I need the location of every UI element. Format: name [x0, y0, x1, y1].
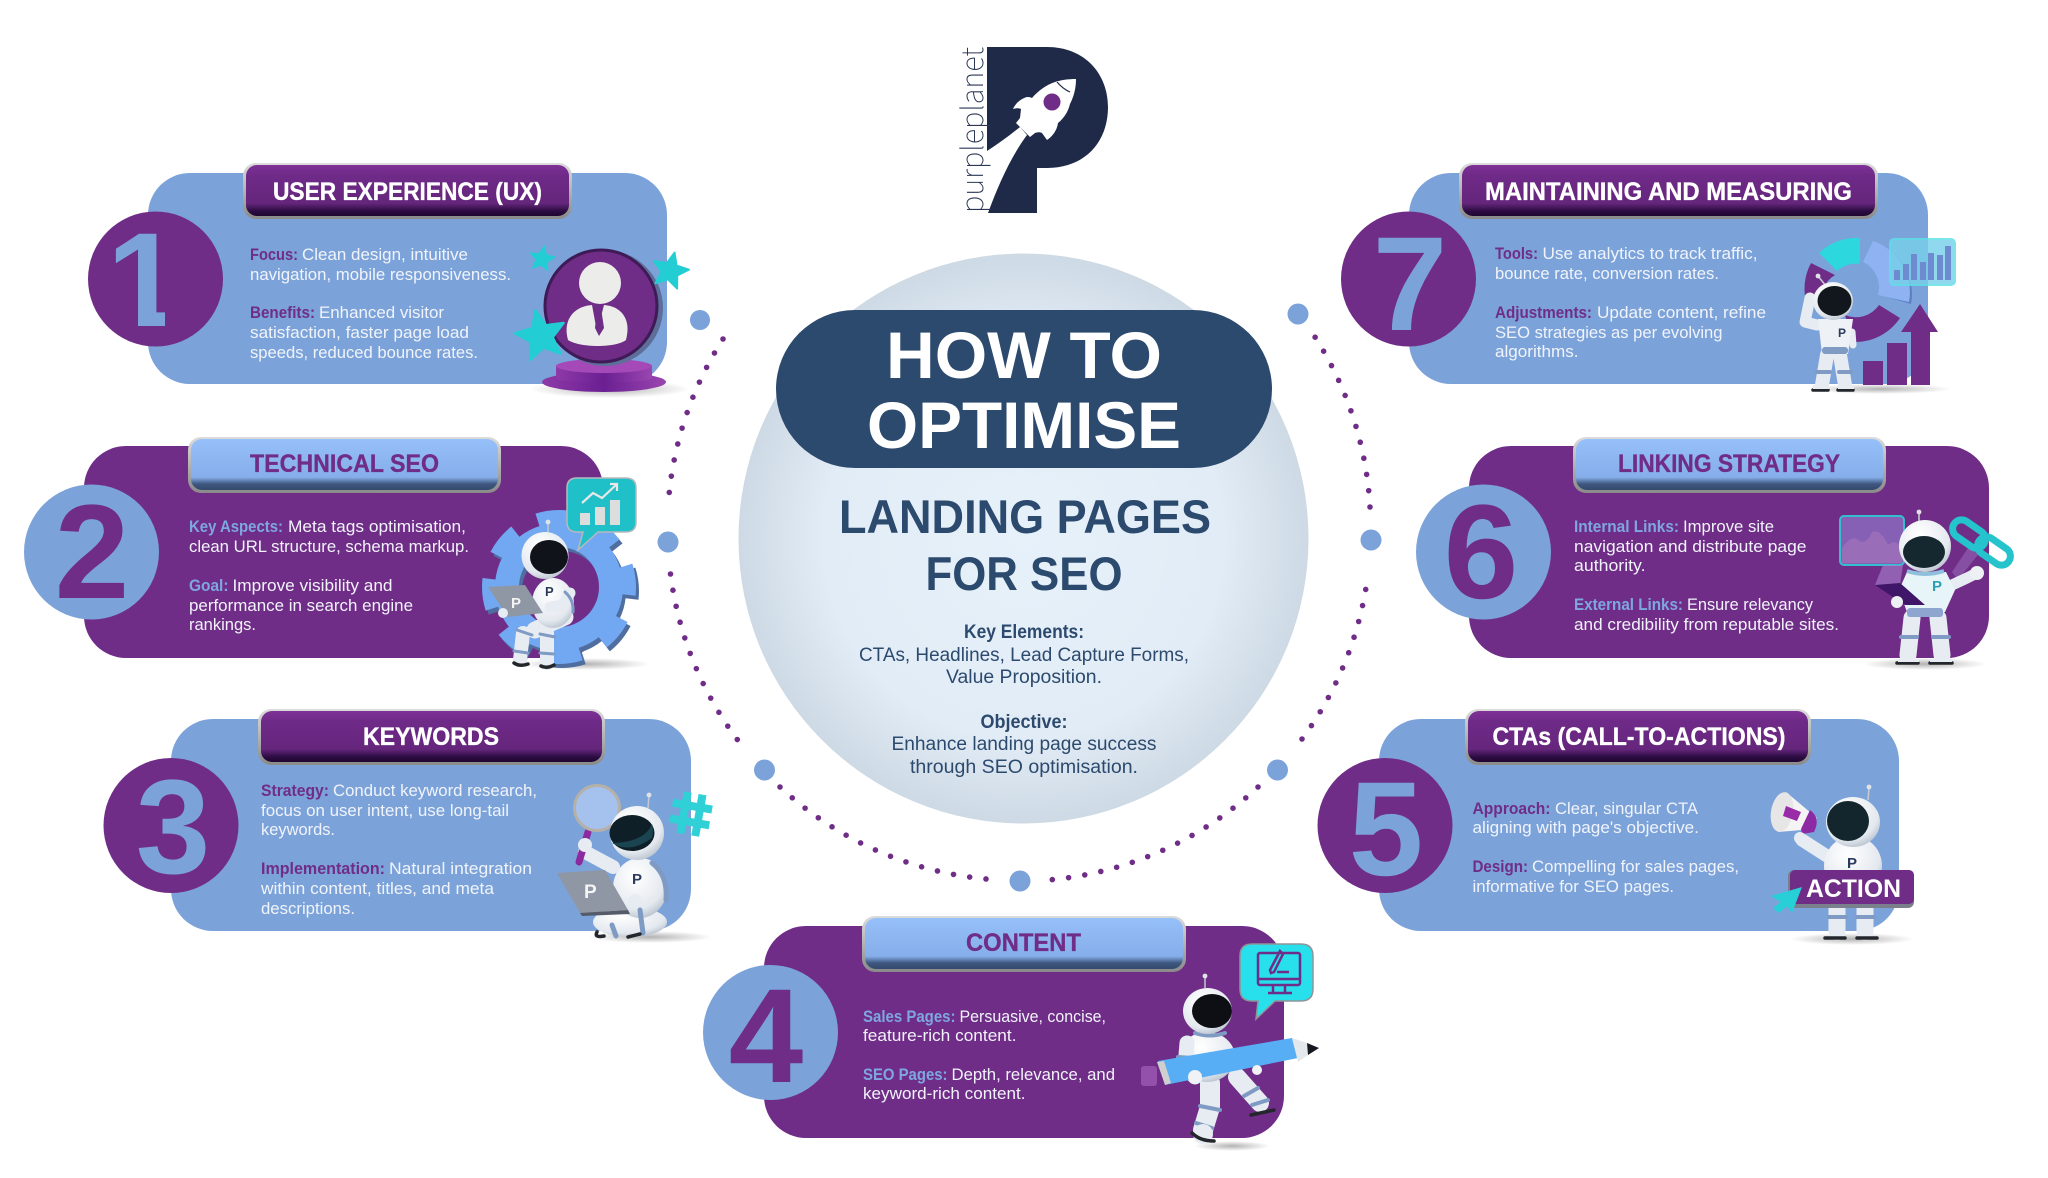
heading: [243, 163, 572, 219]
body text: Clear, singular CTA: [1555, 799, 1699, 818]
body text: feature-rich content.: [863, 1026, 1016, 1045]
heading: [1573, 437, 1886, 493]
heading: [258, 709, 605, 765]
body text: Approach:: [1472, 799, 1550, 818]
heading: [188, 437, 501, 493]
body text: Benefits:: [250, 303, 315, 322]
body text: Tools:: [1495, 244, 1538, 263]
body text: Ensure relevancy: [1687, 595, 1813, 614]
body text: algorithms.: [1495, 342, 1578, 361]
icon: astronaut with gear and laptop: P: [511, 595, 521, 612]
body text: Improve visibility and: [232, 576, 392, 595]
body text: Use analytics to track traffic,: [1542, 244, 1758, 263]
body text: SEO Pages:: [863, 1065, 948, 1084]
body text: [863, 1007, 1115, 1103]
body text: Improve site: [1683, 517, 1774, 536]
heading: [862, 916, 1186, 972]
icon: user medallion on pedestal: [511, 244, 692, 398]
logo: purpleplanet: purpleplanet: [948, 47, 992, 213]
heading: CONTENT: [966, 929, 1081, 957]
heading: [1465, 709, 1811, 765]
icon: astronaut with megaphone and action sign: ACTION: [1806, 875, 1901, 903]
body text: informative for SEO pages.: [1472, 877, 1674, 896]
panel 7: maintaining and measuring: [1341, 163, 1955, 394]
panel 5: ctas: [1318, 709, 1914, 945]
body text: [250, 245, 511, 362]
heading: MAINTAINING AND MEASURING: [1485, 178, 1852, 206]
body text: Compelling for sales pages,: [1532, 857, 1739, 876]
centre body text: Enhance landing page success: [892, 734, 1156, 755]
body text: navigation, mobile responsiveness.: [250, 265, 511, 284]
body text: [1495, 244, 1766, 361]
number 1: 1: [107, 206, 181, 355]
title: how to optimise: [867, 318, 1181, 462]
body text: rankings.: [189, 615, 256, 634]
number 6: 6: [1444, 478, 1518, 627]
body text: performance in search engine: [189, 596, 413, 615]
body text: Clean design, intuitive: [302, 245, 468, 264]
logo: purpleplanet: [948, 47, 1108, 213]
icon: astronaut with gear and laptop: [488, 478, 650, 670]
icon: astronaut with chart, tablet and chain link: [1840, 510, 2014, 670]
body text: keywords.: [261, 820, 335, 839]
icon: astronaut with megaphone and action sign: [1768, 785, 1914, 945]
title: how to optimise: OPTIMISE: [867, 388, 1181, 462]
number 7: 7: [1373, 210, 1447, 359]
number 4: 4: [729, 962, 803, 1111]
centre body text: through SEO optimisation.: [910, 757, 1138, 778]
body text: authority.: [1574, 556, 1646, 575]
body text: focus on user intent, use long-tail: [261, 801, 509, 820]
dotted ring connecting the panels: [668, 337, 1370, 880]
body text: Depth, relevance, and: [952, 1065, 1115, 1084]
centre body text: Objective:: [980, 712, 1068, 733]
panel 1: user experience: [88, 163, 692, 398]
body text: Key Aspects:: [189, 517, 283, 536]
number 1: [88, 206, 223, 355]
body text: [260, 781, 537, 918]
icon: astronaut with magnifier and laptop: [557, 786, 714, 943]
heading: CTAs (CALL-TO-ACTIONS): [1492, 723, 1786, 751]
body text: Implementation:: [261, 859, 385, 878]
title: how to optimise: HOW TO: [886, 318, 1162, 392]
subtitle: landing pages for seo: [839, 490, 1211, 600]
heading: TECHNICAL SEO: [250, 450, 439, 478]
body text: Goal:: [189, 576, 228, 595]
body text: [189, 517, 469, 634]
body text: External Links:: [1574, 595, 1683, 614]
centre body text: [859, 622, 1189, 778]
panel 3: keywords: [104, 709, 714, 943]
panel: centre title: [738, 254, 1308, 824]
body text: Focus:: [250, 245, 298, 264]
number 3: [104, 753, 238, 902]
body text: clean URL structure, schema markup.: [189, 537, 469, 556]
number 5: [1318, 755, 1452, 904]
centre body text: Key Elements:: [964, 622, 1084, 643]
body text: keyword-rich content.: [863, 1084, 1026, 1103]
body text: bounce rate, conversion rates.: [1495, 264, 1719, 283]
body text: Enhanced visitor: [319, 303, 444, 322]
icon: astronaut with chart, tablet and chain link: P: [1932, 578, 1942, 595]
icon: astronaut with donut chart, bars and arrow: P: [1838, 326, 1846, 340]
icon: hash: [668, 790, 714, 838]
icon: astronaut with donut chart, bars and arrow: [1804, 238, 1955, 394]
body text: navigation and distribute page: [1574, 537, 1806, 556]
subtitle: landing pages for seo: FOR SEO: [926, 547, 1122, 600]
panel 2: technical seo: [24, 437, 650, 670]
body text: satisfaction, faster page load: [250, 323, 469, 342]
body text: SEO strategies as per evolving: [1495, 323, 1722, 342]
number 4: [703, 962, 838, 1111]
icon: astronaut with magnifier and laptop: P: [632, 871, 642, 888]
body text: Strategy:: [261, 781, 329, 800]
icon: astronaut with megaphone and action sign: P: [1847, 855, 1857, 872]
number 6: [1416, 478, 1551, 627]
body text: and credibility from reputable sites.: [1574, 615, 1839, 634]
body text: Natural integration: [389, 859, 532, 878]
number 5: 5: [1349, 755, 1423, 904]
body text: speeds, reduced bounce rates.: [250, 343, 478, 362]
heading: [1459, 163, 1878, 219]
body text: Conduct keyword research,: [333, 781, 537, 800]
centre body text: CTAs, Headlines, Lead Capture Forms,: [859, 645, 1189, 666]
icon: astronaut with gear and laptop: P: [545, 584, 554, 599]
body text: [1574, 517, 1839, 634]
icon: astronaut with pencil and speech bubble: [1141, 944, 1319, 1151]
body text: Adjustments:: [1495, 303, 1592, 322]
body text: aligning with page's objective.: [1472, 818, 1699, 837]
heading: KEYWORDS: [363, 723, 499, 751]
body text: Persuasive, concise,: [960, 1007, 1106, 1026]
body text: Sales Pages:: [863, 1007, 956, 1026]
number 3: 3: [136, 753, 210, 902]
body text: Internal Links:: [1574, 517, 1679, 536]
body text: Update content, refine: [1597, 303, 1766, 322]
heading: USER EXPERIENCE (UX): [273, 178, 542, 206]
number 2: 2: [55, 478, 129, 627]
ring nodes: [658, 304, 1382, 892]
icon: astronaut with magnifier and laptop: P: [584, 882, 597, 903]
body text: Meta tags optimisation,: [288, 517, 466, 536]
heading: LINKING STRATEGY: [1618, 450, 1840, 478]
centre body text: Value Proposition.: [946, 667, 1102, 688]
subtitle: landing pages for seo: LANDING PAGES: [839, 490, 1211, 543]
body text: Design:: [1472, 857, 1528, 876]
number 2: [24, 478, 159, 627]
body text: descriptions.: [261, 899, 355, 918]
body text: within content, titles, and meta: [260, 879, 495, 898]
panel 6: linking strategy: [1416, 437, 2014, 670]
number 7: [1341, 210, 1476, 359]
body text: [1472, 799, 1739, 896]
panel 4: content: [703, 916, 1319, 1151]
